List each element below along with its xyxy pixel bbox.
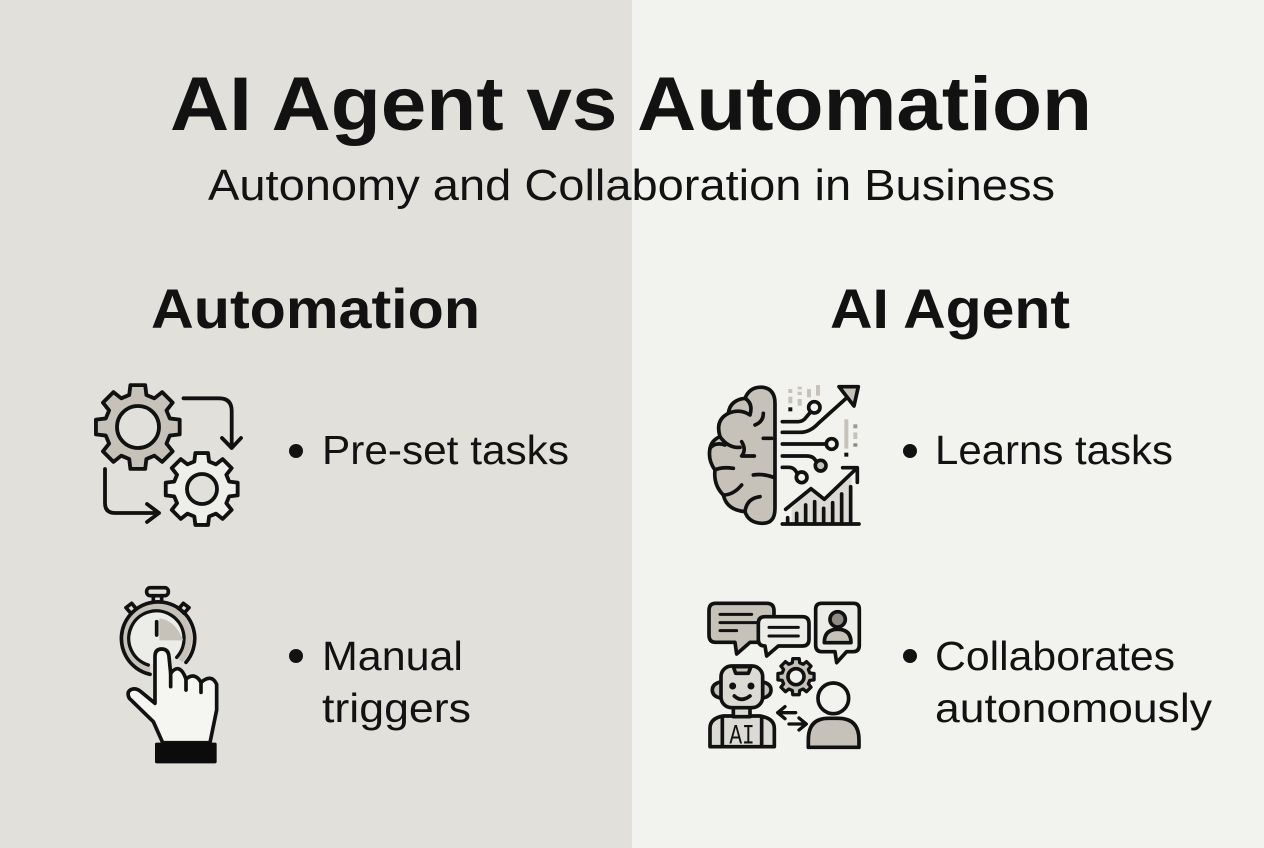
double arrow <box>778 707 806 730</box>
icon: gears with arrows <box>96 385 241 525</box>
robot forehead <box>733 667 751 673</box>
outer ring <box>121 602 195 674</box>
subtitle: Autonomy and Collaboration in Business <box>208 161 1055 210</box>
gray ring <box>125 606 189 670</box>
text: manual triggers: Manual <box>322 633 463 679</box>
needle <box>151 622 162 635</box>
robot neck <box>733 707 750 717</box>
arrow: bottom left <box>105 469 159 522</box>
title: AI Agent vs Automation <box>170 62 1092 147</box>
heading: AI Agent: AI Agent <box>830 277 1070 340</box>
person head <box>818 683 849 714</box>
text: learns tasks: Learns tasks <box>935 427 1173 473</box>
stem <box>153 596 162 602</box>
robot body <box>710 716 774 747</box>
robot smile <box>734 696 750 699</box>
profile head <box>830 612 845 627</box>
gear <box>778 659 814 695</box>
text: collaborates autonomously: autonomously <box>935 685 1213 731</box>
hand <box>128 649 217 743</box>
circuit line lower <box>782 456 816 461</box>
small gear <box>166 453 238 525</box>
arrow: top right <box>184 398 241 448</box>
profile bubble <box>816 603 859 663</box>
inner ring <box>129 611 184 665</box>
profile body <box>824 629 851 643</box>
robot arm lines <box>722 718 762 747</box>
circuit with arrow <box>782 413 810 422</box>
robot ears <box>712 682 771 698</box>
finger lines <box>171 673 201 692</box>
arrow head top <box>839 387 858 406</box>
panel: AI agent background <box>632 0 1264 848</box>
text: pre-set tasks: Pre-set tasks <box>322 427 569 473</box>
icon: brain with circuits and chart <box>709 385 859 524</box>
cuff <box>155 743 217 763</box>
gear hole <box>788 669 804 685</box>
bullet: manual triggers <box>289 649 303 663</box>
circuit line middle <box>782 438 827 449</box>
circuit line lowest <box>782 467 797 473</box>
bullet: collaborates autonomously <box>903 649 917 663</box>
icon: stopwatch with hand <box>121 588 217 763</box>
text: collaborates autonomously <box>935 633 1213 731</box>
speech bubble left <box>709 603 774 654</box>
speech bubble middle <box>758 617 809 656</box>
text: collaborates autonomously: Collaborates <box>935 633 1175 679</box>
AI label: AI <box>729 721 755 752</box>
speech lines middle <box>769 627 798 636</box>
person body <box>808 718 859 747</box>
bullet: learns tasks <box>903 444 917 458</box>
crown <box>147 588 168 596</box>
speech lines left <box>720 614 760 631</box>
chart shading <box>792 477 852 523</box>
chart trend arrow <box>786 468 857 509</box>
robot eyes <box>731 684 734 688</box>
quadrant <box>159 618 183 640</box>
small gear hole <box>187 474 217 504</box>
chart bars <box>782 487 859 524</box>
big gear hole <box>117 406 159 448</box>
robot head <box>721 666 763 708</box>
side buttons <box>126 603 189 613</box>
brain folds <box>710 398 773 512</box>
icon: AI and human collaboration <box>709 603 859 752</box>
text: manual triggers: triggers <box>322 685 471 731</box>
panel: automation background <box>0 0 632 848</box>
bullet: pre-set tasks <box>289 444 303 458</box>
data dots <box>788 385 857 457</box>
big gear <box>96 385 180 469</box>
text: manual triggers <box>322 633 471 731</box>
brain <box>709 387 775 523</box>
heading: Automation: Automation <box>151 277 480 340</box>
